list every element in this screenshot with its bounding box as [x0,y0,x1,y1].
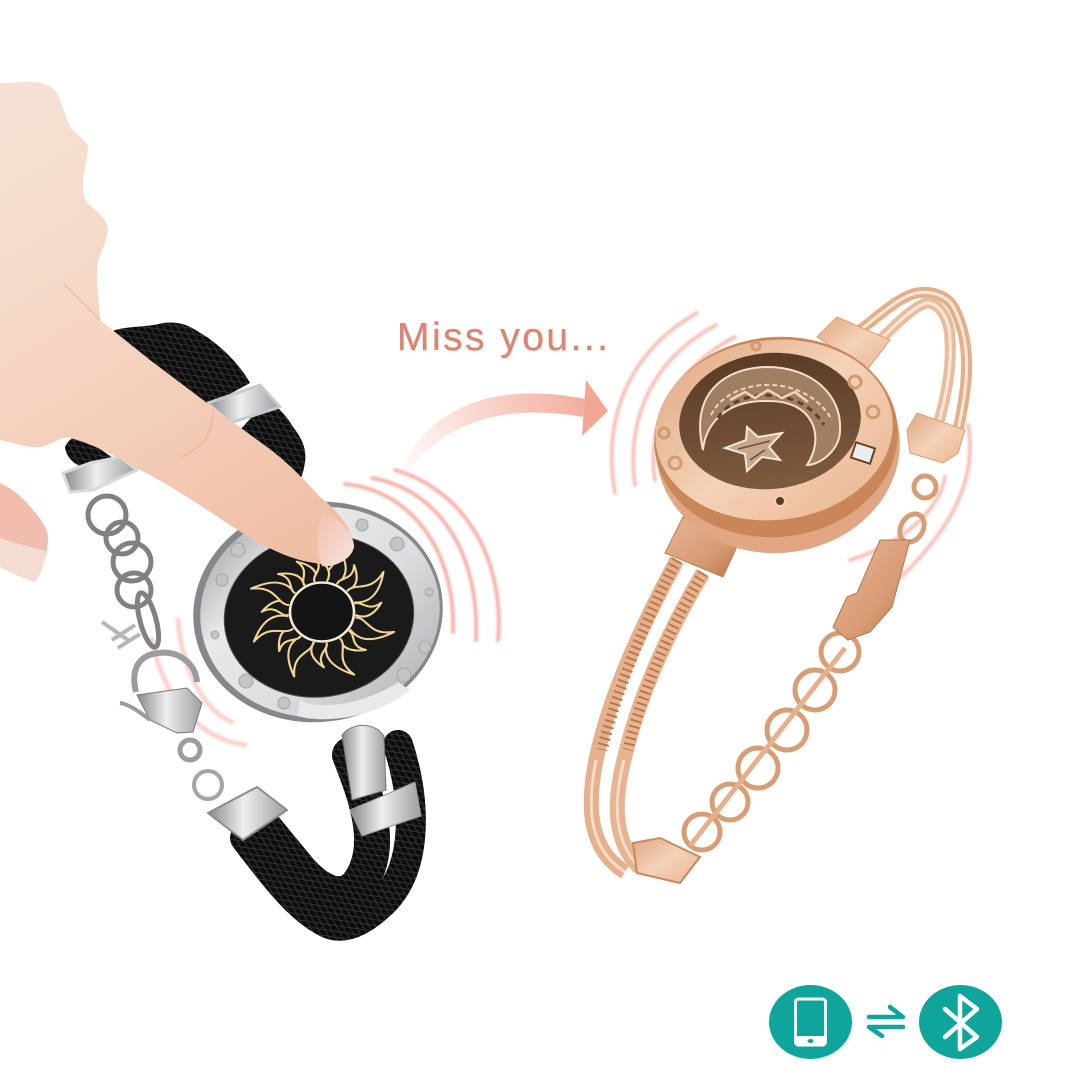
thumb [0,483,48,582]
silver bezel markings [211,519,433,709]
right bracelet: rose gold sliders [665,317,965,577]
icon: bluetooth in teal circle [919,985,1002,1059]
left bracelet: lower braided band [245,745,411,926]
left bracelet: silver case with sun [179,486,457,738]
left bracelet: silver chain and clasp [88,496,222,799]
knuckle crease [180,410,213,457]
right bracelet: upper wires [860,292,967,430]
sun emblem [248,543,394,680]
fingernail [318,512,354,566]
heading: Miss you: Miss you... [397,316,608,359]
icon: phone in teal circle [769,985,852,1059]
left bracelet: silver sliders [63,385,421,840]
left bracelet: upper braided band [65,322,305,480]
star [725,427,782,471]
right bracelet: clasp [633,540,910,883]
curved arrow [398,380,608,476]
hand with pointing finger [0,82,354,582]
bezel engravings [659,342,879,469]
icon: two-way arrows [869,1007,903,1036]
gem [851,442,875,464]
vibration waves: left bracelet [152,470,499,745]
right bracelet: rose gold case with moon [644,325,910,565]
right bracelet: lower wires [591,560,703,872]
vibration waves: right bracelet [612,313,970,578]
moon emblem [700,367,840,465]
right bracelet: rose gold chain [684,476,936,850]
